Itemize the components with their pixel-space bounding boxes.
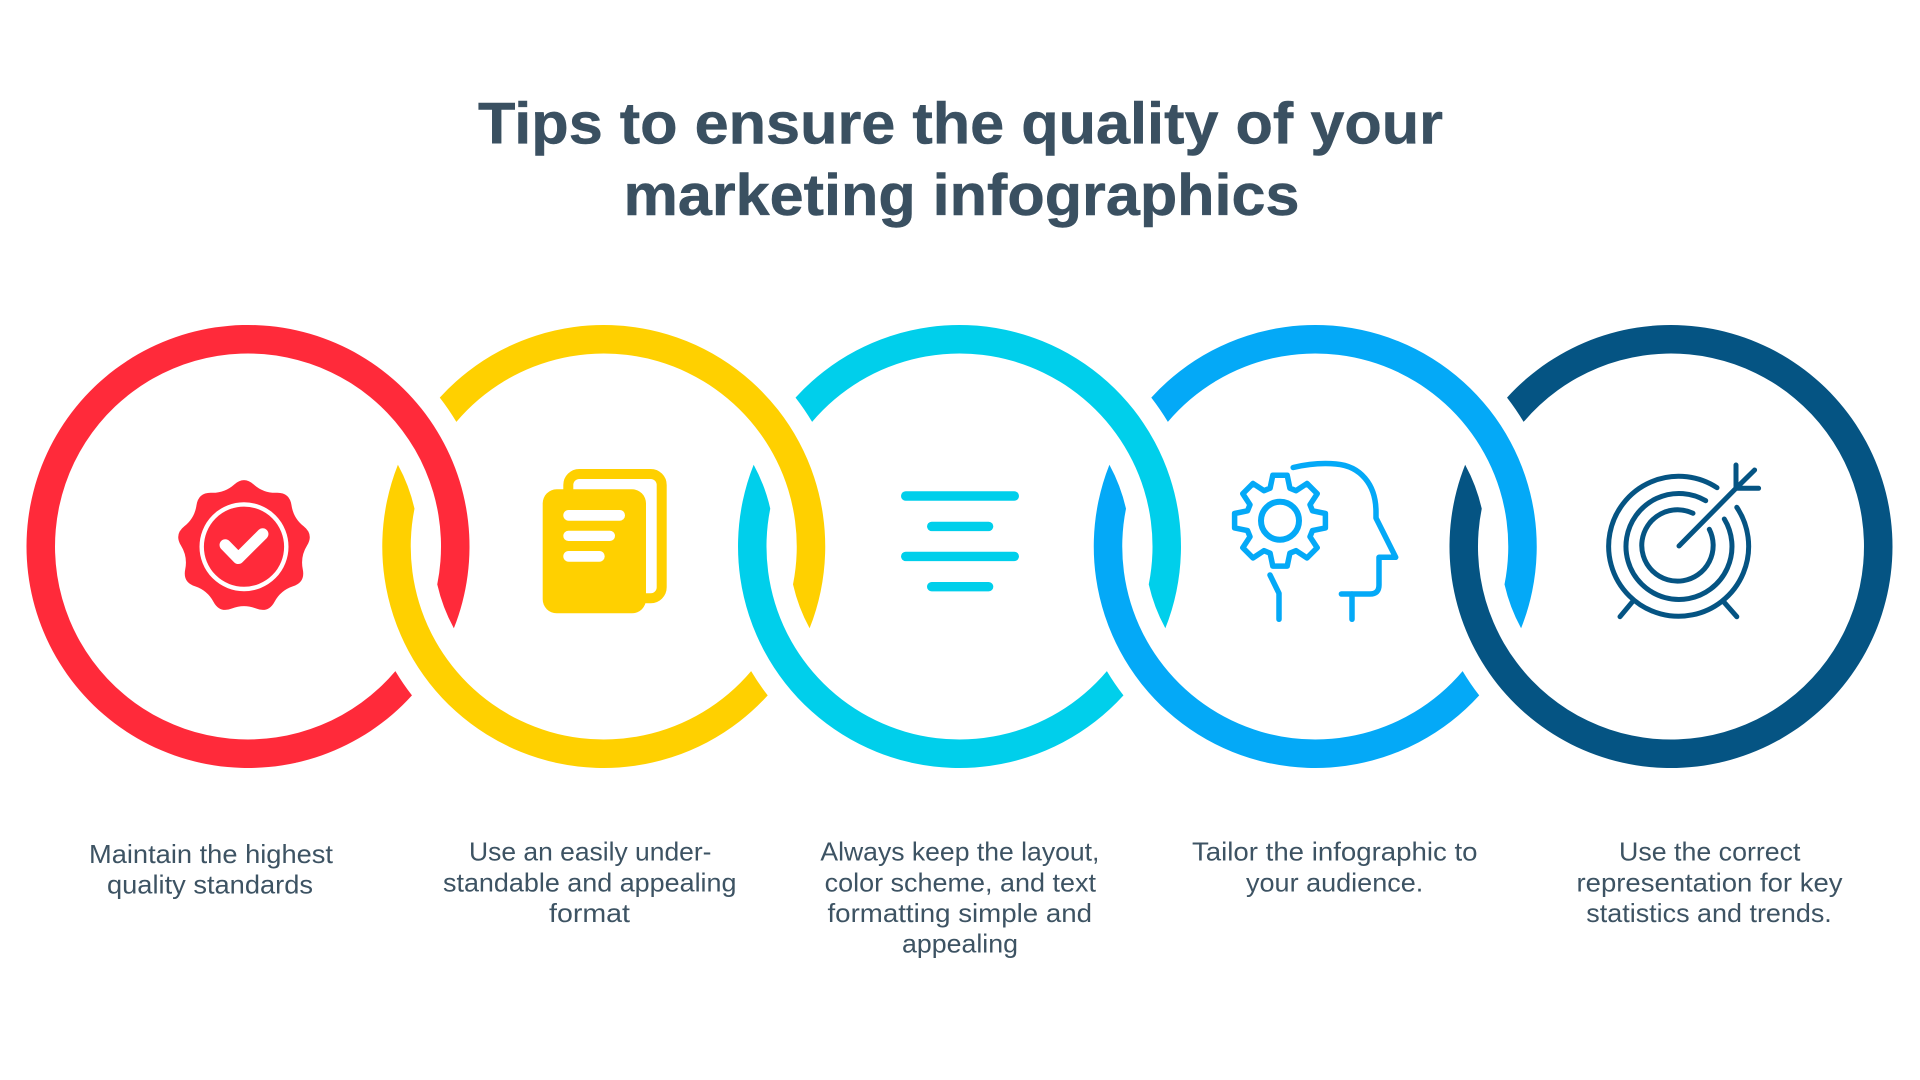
text: tip 5: statistics and trends. (1586, 898, 1832, 928)
icon: target with arrow (1609, 465, 1759, 617)
text: tip 3: color scheme, and text (825, 867, 1097, 897)
title (478, 92, 1443, 228)
text: tip 3: formatting simple and (828, 898, 1092, 928)
icon: head with gear (1235, 464, 1396, 619)
icon: centered text lines (901, 491, 1019, 591)
title: Tips to ensure the quality of your (478, 92, 1443, 156)
text: tip 5: Use the correct (1619, 837, 1801, 867)
ring 4: blue (1094, 325, 1537, 768)
ring 2: yellow (382, 325, 825, 768)
text: tip 2 (443, 837, 736, 928)
ring 3: cyan (738, 325, 1181, 768)
text: tip 2: Use an easily under- (469, 837, 712, 867)
text: tip 3: appealing (902, 929, 1018, 959)
text: tip 2: standable and appealing (443, 867, 736, 897)
text: tip 2: format (549, 898, 631, 928)
text: tip 4: Tailor the infographic to (1192, 837, 1478, 867)
text: tip 3 (820, 837, 1099, 959)
text: tip 1 (89, 839, 334, 900)
ring 1: red (27, 325, 470, 768)
icon: documents (543, 474, 662, 613)
title: marketing infographics (624, 163, 1300, 228)
text: tip 5 (1576, 837, 1842, 928)
text: tip 1: Maintain the highest (89, 839, 334, 869)
ring 5: navy (1449, 325, 1892, 768)
text: tip 1: quality standards (107, 870, 313, 900)
icon: quality badge (178, 480, 310, 610)
text: tip 4: your audience. (1246, 867, 1423, 897)
text: tip 4 (1192, 837, 1478, 897)
text: tip 5: representation for key (1576, 867, 1842, 897)
text: tip 3: Always keep the layout, (820, 837, 1099, 867)
